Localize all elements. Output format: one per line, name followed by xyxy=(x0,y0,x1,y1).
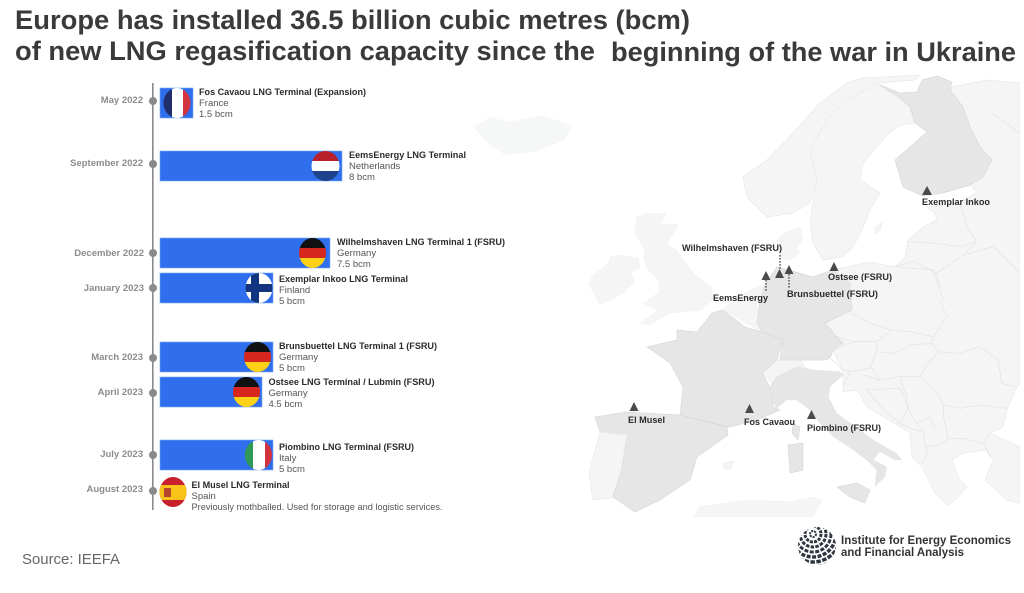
marker: Piombino xyxy=(807,410,881,434)
title: beginning of the war in Ukraine xyxy=(611,37,1016,67)
map: central and Balkan borders xyxy=(830,300,1017,463)
map: Norway xyxy=(743,75,920,217)
map: Sardinia xyxy=(788,443,803,473)
date labels: July 2023 xyxy=(100,449,143,460)
marker: Exemplar Inkoo: Exemplar Inkoo xyxy=(922,197,990,208)
title: Europe has installed 36.5 billion cubic metres (bcm) xyxy=(15,5,690,35)
date labels: April 2023 xyxy=(98,387,143,398)
map: Sicily xyxy=(837,483,870,503)
row: Exemplar Inkoo: 5 bcm xyxy=(279,296,305,307)
marker: EemsEnergy xyxy=(713,271,770,304)
row: Ostsee xyxy=(160,377,434,410)
map: Denmark xyxy=(777,227,803,260)
timeline axis xyxy=(149,83,157,510)
marker: Wilhelmshaven: Wilhelmshaven (FSRU) xyxy=(682,243,782,254)
row: Brunsbuettel: Germany xyxy=(279,352,318,363)
map: North Africa xyxy=(693,497,822,517)
map: Iceland xyxy=(473,115,572,155)
row: El Musel xyxy=(159,477,442,513)
row: Wilhelmshaven: Wilhelmshaven LNG Terminal 1 (FSRU) xyxy=(337,237,505,248)
map: Corsica xyxy=(792,423,800,440)
map: Gotland xyxy=(875,223,882,233)
row: Ostsee: Ostsee LNG Terminal / Lubmin (FSRU) xyxy=(268,377,434,388)
marker: Fos Cavaou: Fos Cavaou xyxy=(744,417,795,428)
date labels: September 2022 xyxy=(70,158,143,169)
map: Balearic islands xyxy=(723,461,733,469)
logo: IEEFA: Institute for Energy Economics xyxy=(841,535,1011,547)
marker: El Musel: El Musel xyxy=(628,415,665,426)
row: Brunsbuettel: Brunsbuettel LNG Terminal 1 (FSRU) xyxy=(279,341,437,352)
map: Baltic and Russian borders xyxy=(895,112,1020,300)
row: Brunsbuettel xyxy=(160,341,437,374)
row: El Musel: Previously mothballed. Used for storage and logistic services. xyxy=(192,502,442,513)
row: Ostsee: Germany xyxy=(268,388,308,399)
marker: Exemplar Inkoo xyxy=(922,186,990,208)
title: of new LNG regasification capacity since the xyxy=(15,36,595,66)
marker: Brunsbuettel xyxy=(784,265,878,300)
row: Piombino: 5 bcm xyxy=(279,464,305,475)
logo: IEEFA: and Financial Analysis xyxy=(841,547,964,559)
map: Ireland xyxy=(588,255,640,305)
row: El Musel: Spain xyxy=(192,491,216,502)
row: Ostsee: 4.5 bcm xyxy=(268,399,302,410)
map: Switzerland xyxy=(762,360,807,383)
map: Italy xyxy=(770,367,902,487)
source note: Source: IEEFA xyxy=(22,551,120,568)
row: Wilhelmshaven xyxy=(160,237,505,270)
row: Piombino: Piombino LNG Terminal (FSRU) xyxy=(279,442,414,453)
row: Piombino xyxy=(160,440,414,475)
row: Fos Cavaou: France xyxy=(199,98,229,109)
date labels: August 2023 xyxy=(86,484,143,495)
date labels xyxy=(70,95,144,495)
row: Fos Cavaou xyxy=(160,87,366,120)
marker: El Musel xyxy=(628,402,664,423)
row: Fos Cavaou: 1.5 bcm xyxy=(199,109,233,120)
marker: Ostsee xyxy=(828,262,892,283)
logo: IEEFA xyxy=(780,501,1011,567)
map: Portugal xyxy=(589,432,627,500)
date labels: May 2022 xyxy=(101,95,143,106)
row: EemsEnergy: Netherlands xyxy=(349,161,400,172)
row: EemsEnergy xyxy=(160,150,466,183)
row: Exemplar Inkoo xyxy=(160,273,408,307)
date labels: December 2022 xyxy=(74,248,144,259)
map: Spain xyxy=(595,412,728,512)
map: France xyxy=(647,310,783,427)
row: Exemplar Inkoo: Finland xyxy=(279,285,310,296)
marker: Fos Cavaou xyxy=(744,404,794,425)
map: British Isles xyxy=(588,213,713,325)
row: EemsEnergy: EemsEnergy LNG Terminal xyxy=(349,150,466,161)
date labels: January 2023 xyxy=(84,283,144,294)
marker: EemsEnergy: EemsEnergy xyxy=(713,293,769,304)
map: Germany xyxy=(757,267,852,360)
row: EemsEnergy: 8 bcm xyxy=(349,172,375,183)
map: Great Britain xyxy=(635,213,713,325)
marker: Brunsbuettel: Brunsbuettel (FSRU) xyxy=(787,289,878,300)
map: eastern Europe xyxy=(825,80,1020,505)
row: Piombino: Italy xyxy=(279,453,297,464)
marker: Ostsee: Ostsee (FSRU) xyxy=(828,272,892,283)
title xyxy=(15,5,1016,67)
row: Wilhelmshaven: Germany xyxy=(337,248,376,259)
map: Benelux xyxy=(723,285,765,332)
map of Europe xyxy=(473,75,1020,517)
marker: Wilhelmshaven xyxy=(682,243,784,278)
row: Brunsbuettel: 5 bcm xyxy=(279,363,305,374)
marker: Piombino: Piombino (FSRU) xyxy=(807,423,881,434)
date labels: March 2023 xyxy=(91,352,143,363)
row: Fos Cavaou: Fos Cavaou LNG Terminal (Expansion) xyxy=(199,87,366,98)
map: Sweden xyxy=(810,83,915,260)
row: Wilhelmshaven: 7.5 bcm xyxy=(337,259,371,270)
row: Exemplar Inkoo: Exemplar Inkoo LNG Terminal xyxy=(279,274,408,285)
map: Finland xyxy=(880,76,992,196)
row: El Musel: El Musel LNG Terminal xyxy=(192,480,290,491)
